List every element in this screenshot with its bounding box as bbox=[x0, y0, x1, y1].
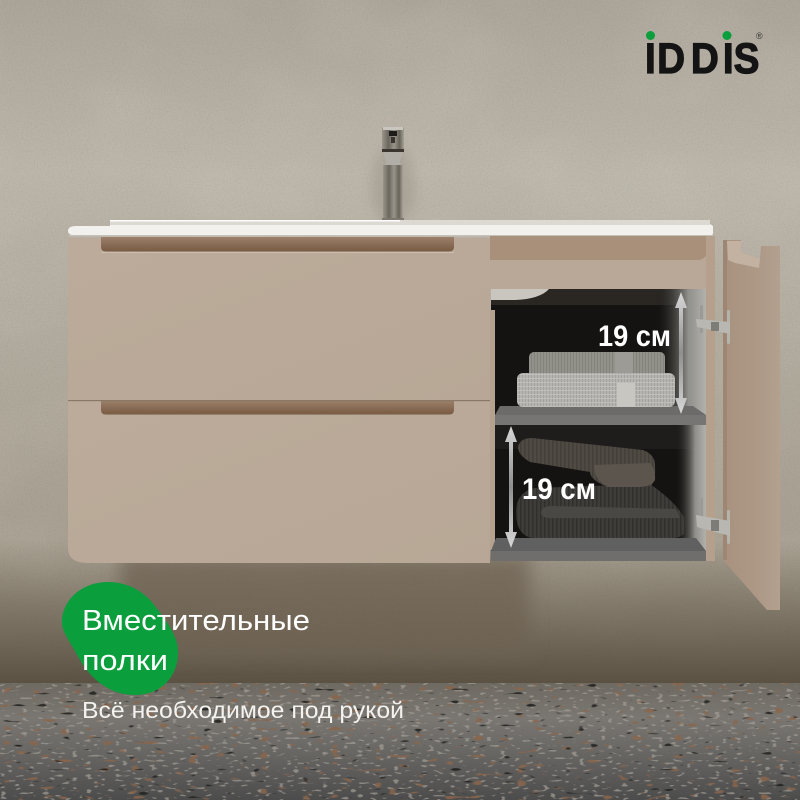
cabinet: upper drawer bbox=[68, 237, 490, 400]
lower shelf bbox=[491, 538, 706, 561]
dark towels on lower shelf bbox=[516, 438, 686, 538]
open shelf compartment bbox=[490, 289, 706, 561]
heading: Вместительные полки bbox=[82, 605, 310, 677]
faucet bbox=[371, 127, 415, 225]
subheading: Всё необходимое под рукой bbox=[82, 697, 404, 723]
logo: IDDIS: ® bbox=[756, 31, 763, 41]
logo: IDDIS: IDDIS bbox=[645, 34, 759, 82]
washbasin bbox=[68, 220, 713, 236]
arrow: upper shelf height bbox=[675, 292, 687, 414]
upper shelf bbox=[495, 406, 706, 425]
heading: Вместительные полки: полки bbox=[82, 645, 168, 677]
arrow: lower shelf height bbox=[505, 426, 517, 548]
hinge: lower bbox=[696, 498, 730, 544]
background: terrazzo floor bbox=[0, 683, 800, 800]
cabinet: right carcass bbox=[490, 236, 715, 561]
dimension: upper shelf 19 cm: 19 см bbox=[598, 320, 671, 353]
badge: green blob bbox=[62, 582, 178, 695]
white towels on upper shelf bbox=[517, 352, 675, 407]
cabinet: lower drawer bbox=[68, 400, 490, 563]
open door bbox=[723, 240, 780, 610]
hinge: upper bbox=[696, 305, 730, 344]
dimension: lower shelf 19 cm: 19 см bbox=[522, 473, 596, 506]
heading: Вместительные полки: Вместительные bbox=[82, 605, 310, 637]
